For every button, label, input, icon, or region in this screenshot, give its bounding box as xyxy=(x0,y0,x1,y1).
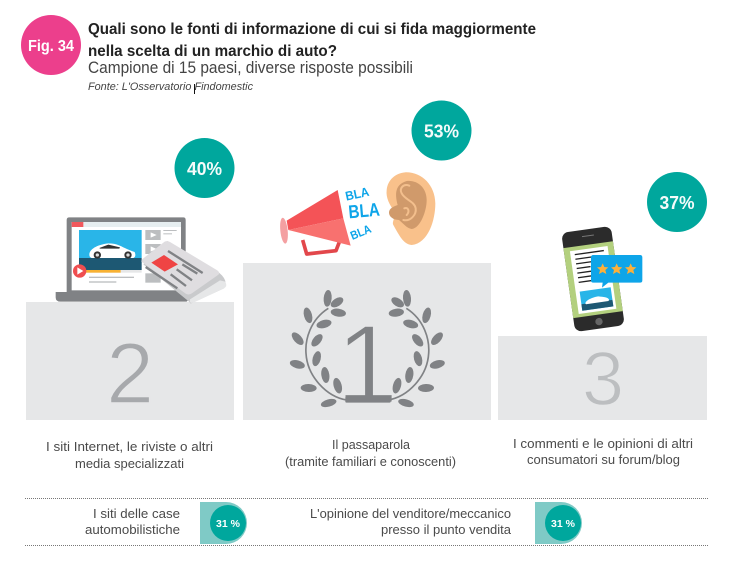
figure badge xyxy=(21,15,81,75)
percentage: 53% xyxy=(412,100,472,160)
podium: second place xyxy=(26,302,234,422)
secondary source: seller or mechanic: 31 % xyxy=(551,518,576,530)
icon: laurel wreath with number one: 1 xyxy=(336,302,398,427)
caption: first place: (tramite familiari e conoscenti) xyxy=(285,454,456,469)
caption: third place xyxy=(513,436,693,467)
caption: second place: I siti Internet, le riviste o altri xyxy=(46,439,213,454)
caption: second place xyxy=(46,439,213,471)
caption: third place: I commenti e le opinioni di altri xyxy=(513,436,693,451)
percentage: 40% xyxy=(174,138,234,198)
phone xyxy=(561,226,625,332)
text: bla bla bla xyxy=(344,185,381,243)
rating bubble xyxy=(591,255,642,288)
title: Quali sono le fonti di informazione di cui si fida maggiormente xyxy=(88,21,536,38)
podium: third place: 3 xyxy=(582,337,624,422)
icon: laurel wreath with number one xyxy=(289,290,446,427)
text: bla bla bla: BLA xyxy=(348,199,381,222)
percentage: 40%: 40% xyxy=(187,159,222,179)
percentage: 53%: 53% xyxy=(424,122,459,142)
percentage: 37% xyxy=(647,172,707,232)
icon: laptop and newspaper xyxy=(56,217,226,304)
caption: first place: Il passaparola xyxy=(332,437,411,452)
title: nella scelta di un marchio di auto? xyxy=(88,43,337,60)
secondary source: seller or mechanic: L'opinione del venditore/meccanico xyxy=(310,506,511,521)
secondary source: manufacturers' sites: I siti delle case xyxy=(93,506,180,521)
secondary source: manufacturers' sites: automobilistiche xyxy=(85,522,180,537)
title xyxy=(88,21,536,60)
text: bla bla bla: BLA xyxy=(348,222,374,243)
source: Fonte: L'Osservatorio Findomestic xyxy=(88,81,253,93)
text: bla bla bla: BLA xyxy=(344,185,370,204)
podium: third place xyxy=(498,336,707,422)
secondary source: manufacturers' sites xyxy=(85,502,247,544)
podium: first place xyxy=(243,263,491,427)
secondary source: manufacturers' sites: 31 % xyxy=(216,518,241,530)
caption: third place: consumatori su forum/blog xyxy=(527,452,680,467)
caption: first place xyxy=(285,437,456,469)
secondary source: seller or mechanic: presso il punto vendita xyxy=(381,522,512,537)
subtitle: Campione di 15 paesi, diverse risposte possibili xyxy=(88,59,413,77)
podium: second place: 2 xyxy=(106,326,154,422)
caption: second place: media specializzati xyxy=(75,456,184,471)
secondary source: seller or mechanic xyxy=(310,502,582,544)
figure badge: Fig. 34 xyxy=(28,38,74,55)
laptop xyxy=(56,217,197,302)
icon: smartphone with rating xyxy=(561,226,642,332)
newspaper xyxy=(141,241,226,304)
icon: megaphone and bla bla xyxy=(279,185,381,254)
icon: ear xyxy=(387,172,435,245)
icon: megaphone xyxy=(279,190,351,254)
percentage: 37%: 37% xyxy=(660,193,694,213)
